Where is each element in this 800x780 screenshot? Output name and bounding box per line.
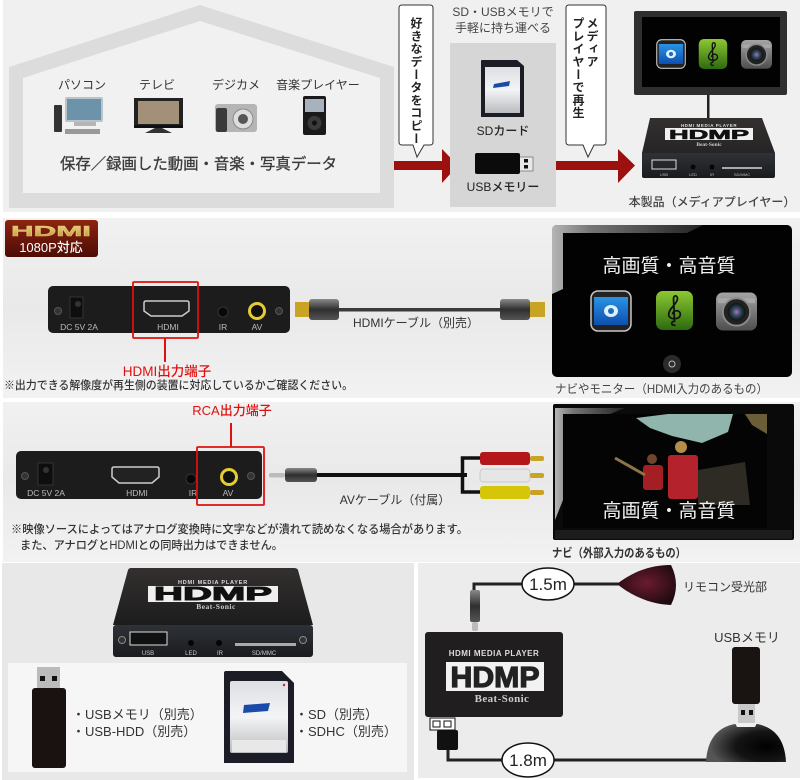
arrow: copy to media xyxy=(394,149,458,183)
panel: home data sources to player flow xyxy=(3,0,800,212)
product: media player small: USB xyxy=(660,172,668,177)
callout: play in media player: メディア xyxy=(585,17,599,68)
heading: saved data: 保存／録画した動画・音楽・写真データ xyxy=(60,154,337,173)
callout: copy favorite data: 好きなデータをコピー xyxy=(409,16,423,145)
text: SD media: ・SD（別売） xyxy=(295,707,378,722)
device rear: AV output xyxy=(16,451,262,499)
television with app icons xyxy=(634,11,787,119)
label: USB memory: USBメモリ xyxy=(714,630,780,645)
highlight: HDMI output box xyxy=(133,282,198,362)
product: media player small: IR xyxy=(710,172,714,177)
panel: HDMI connection xyxy=(3,218,800,398)
product: media player small xyxy=(642,118,775,178)
badge: HDMI 1080P xyxy=(5,220,98,257)
product: media player small: Beat-Sonic xyxy=(696,142,722,148)
AV cable xyxy=(269,452,544,499)
product: media player top view: Beat-Sonic xyxy=(475,693,529,705)
icon: digital camera xyxy=(215,104,257,132)
heading: portable media caption xyxy=(452,5,554,35)
heading: portable media caption: SD・USBメモリで xyxy=(452,5,554,19)
remote sensor xyxy=(617,565,676,605)
icon: USB stick xyxy=(32,667,66,768)
label: HDMI output terminal: HDMI出力端子 xyxy=(123,364,211,379)
product: media player: HDMI MEDIA PLAYER xyxy=(178,580,248,586)
label: HDMI cable: HDMIケーブル（別売） xyxy=(353,315,479,330)
caption: navi external input: ナビ（外部入力のあるもの） xyxy=(552,545,686,560)
text: SD media: ・SDHC（別売） xyxy=(295,724,397,739)
panel: compatible storage xyxy=(8,663,407,772)
product: media player small: HDMP xyxy=(669,127,750,142)
device rear: HDMI output: IR xyxy=(219,322,227,332)
device rear: AV output: HDMI xyxy=(126,488,148,498)
device rear: HDMI output: AV xyxy=(252,322,263,332)
monitor: navi with concert video: 高画質・高音質 xyxy=(602,500,736,522)
device rear: AV output: AV xyxy=(223,488,234,498)
label: 1.5m: 1.5m xyxy=(529,575,567,594)
label: remote sensor: リモコン受光部 xyxy=(683,580,767,594)
device rear: AV output: IR xyxy=(189,488,197,498)
device rear: HDMI output: DC 5V 2A xyxy=(60,322,98,332)
label: 1.8m xyxy=(502,743,554,777)
note: analog conversion xyxy=(11,522,468,552)
badge: HDMI 1080P: 1080P対応 xyxy=(19,240,83,255)
label: 1.5m xyxy=(522,568,574,600)
product: media player small: HDMI MEDIA PLAYER xyxy=(681,123,737,128)
USB cable xyxy=(430,718,710,777)
monitor: navi or HDMI display: 高画質・高音質 xyxy=(602,255,736,277)
note: resolution: ※出力できる解像度が再生側の装置に対応しているかご確認ください。 xyxy=(4,378,353,392)
product: media player: IR xyxy=(217,651,224,657)
product: media player small: LED xyxy=(689,172,697,177)
product: media player top view xyxy=(425,632,563,717)
badge: HDMI 1080P: HDMI xyxy=(11,223,91,240)
text: USB media: ・USB-HDD（別売） xyxy=(72,724,196,739)
panel: cable lengths xyxy=(418,563,800,778)
caption: this product: 本製品（メディアプレイヤー） xyxy=(629,194,795,209)
text: SD media xyxy=(295,707,397,739)
product: media player xyxy=(113,568,313,657)
icon: USB memory upright xyxy=(732,647,760,723)
monitor: navi with concert video xyxy=(553,404,794,540)
device labels: 音楽プレイヤー xyxy=(276,78,360,92)
device labels: テレビ xyxy=(139,78,175,92)
device labels: デジカメ xyxy=(212,77,260,92)
product: media player: Beat-Sonic xyxy=(196,602,236,611)
callout: copy favorite data xyxy=(399,5,433,157)
label: AV cable: AVケーブル（付属） xyxy=(340,492,450,507)
callout: play in media player: プレイヤーで再生 xyxy=(571,17,585,119)
icon: SD card xyxy=(481,60,524,117)
icon: SD card large xyxy=(224,671,294,763)
highlight: AV output box xyxy=(197,423,264,505)
icon: television xyxy=(134,98,183,133)
product: media player: HDMP xyxy=(154,584,272,604)
label: RCA output terminal: RCA出力端子 xyxy=(192,403,272,418)
device rear: AV output: DC 5V 2A xyxy=(27,488,65,498)
USB dock dome xyxy=(706,723,786,762)
caption: navi or monitor: ナビやモニター（HDMI入力のあるもの） xyxy=(555,382,768,396)
icon: computer xyxy=(54,97,103,134)
product: media player: SD/MMC xyxy=(252,651,277,657)
device rear: HDMI output: HDMI xyxy=(157,322,179,332)
panel: supported media xyxy=(2,563,414,780)
panel: portable media xyxy=(450,43,556,207)
label: USB memory: USBメモリー xyxy=(467,180,539,194)
panel: analog AV connection xyxy=(3,402,800,562)
product: media player top view: HDMP xyxy=(450,662,540,694)
product: media player: LED xyxy=(185,651,198,657)
note: analog conversion: ※映像ソースによってはアナログ変換時に文字などが潰れて読めなくなる場合があります。 xyxy=(11,522,468,536)
device labels xyxy=(58,77,360,92)
label: 1.8m: 1.8m xyxy=(509,751,547,770)
monitor: navi or HDMI display xyxy=(552,225,792,377)
icon: USB memory xyxy=(475,153,533,174)
product: media player: USB xyxy=(142,651,154,657)
text: USB media: ・USBメモリ（別売） xyxy=(72,707,203,722)
heading: portable media caption: 手軽に持ち運べる xyxy=(455,20,551,35)
icon: music player xyxy=(303,96,326,135)
note: analog conversion: また、アナログとHDMIとの同時出力はできません。 xyxy=(20,538,283,552)
arrow: play on player xyxy=(556,149,635,183)
house outline xyxy=(9,5,394,208)
product: media player small: SD/MMC xyxy=(734,172,750,177)
text: USB media xyxy=(72,707,203,739)
label: SD card: SDカード xyxy=(477,124,529,138)
HDMI cable xyxy=(295,299,545,320)
product: media player top view: HDMI MEDIA PLAYER xyxy=(449,649,539,658)
callout: play in media player xyxy=(566,5,606,157)
device rear: HDMI output xyxy=(48,286,290,333)
device labels: パソコン xyxy=(58,78,106,92)
remote sensor cable xyxy=(470,568,620,631)
